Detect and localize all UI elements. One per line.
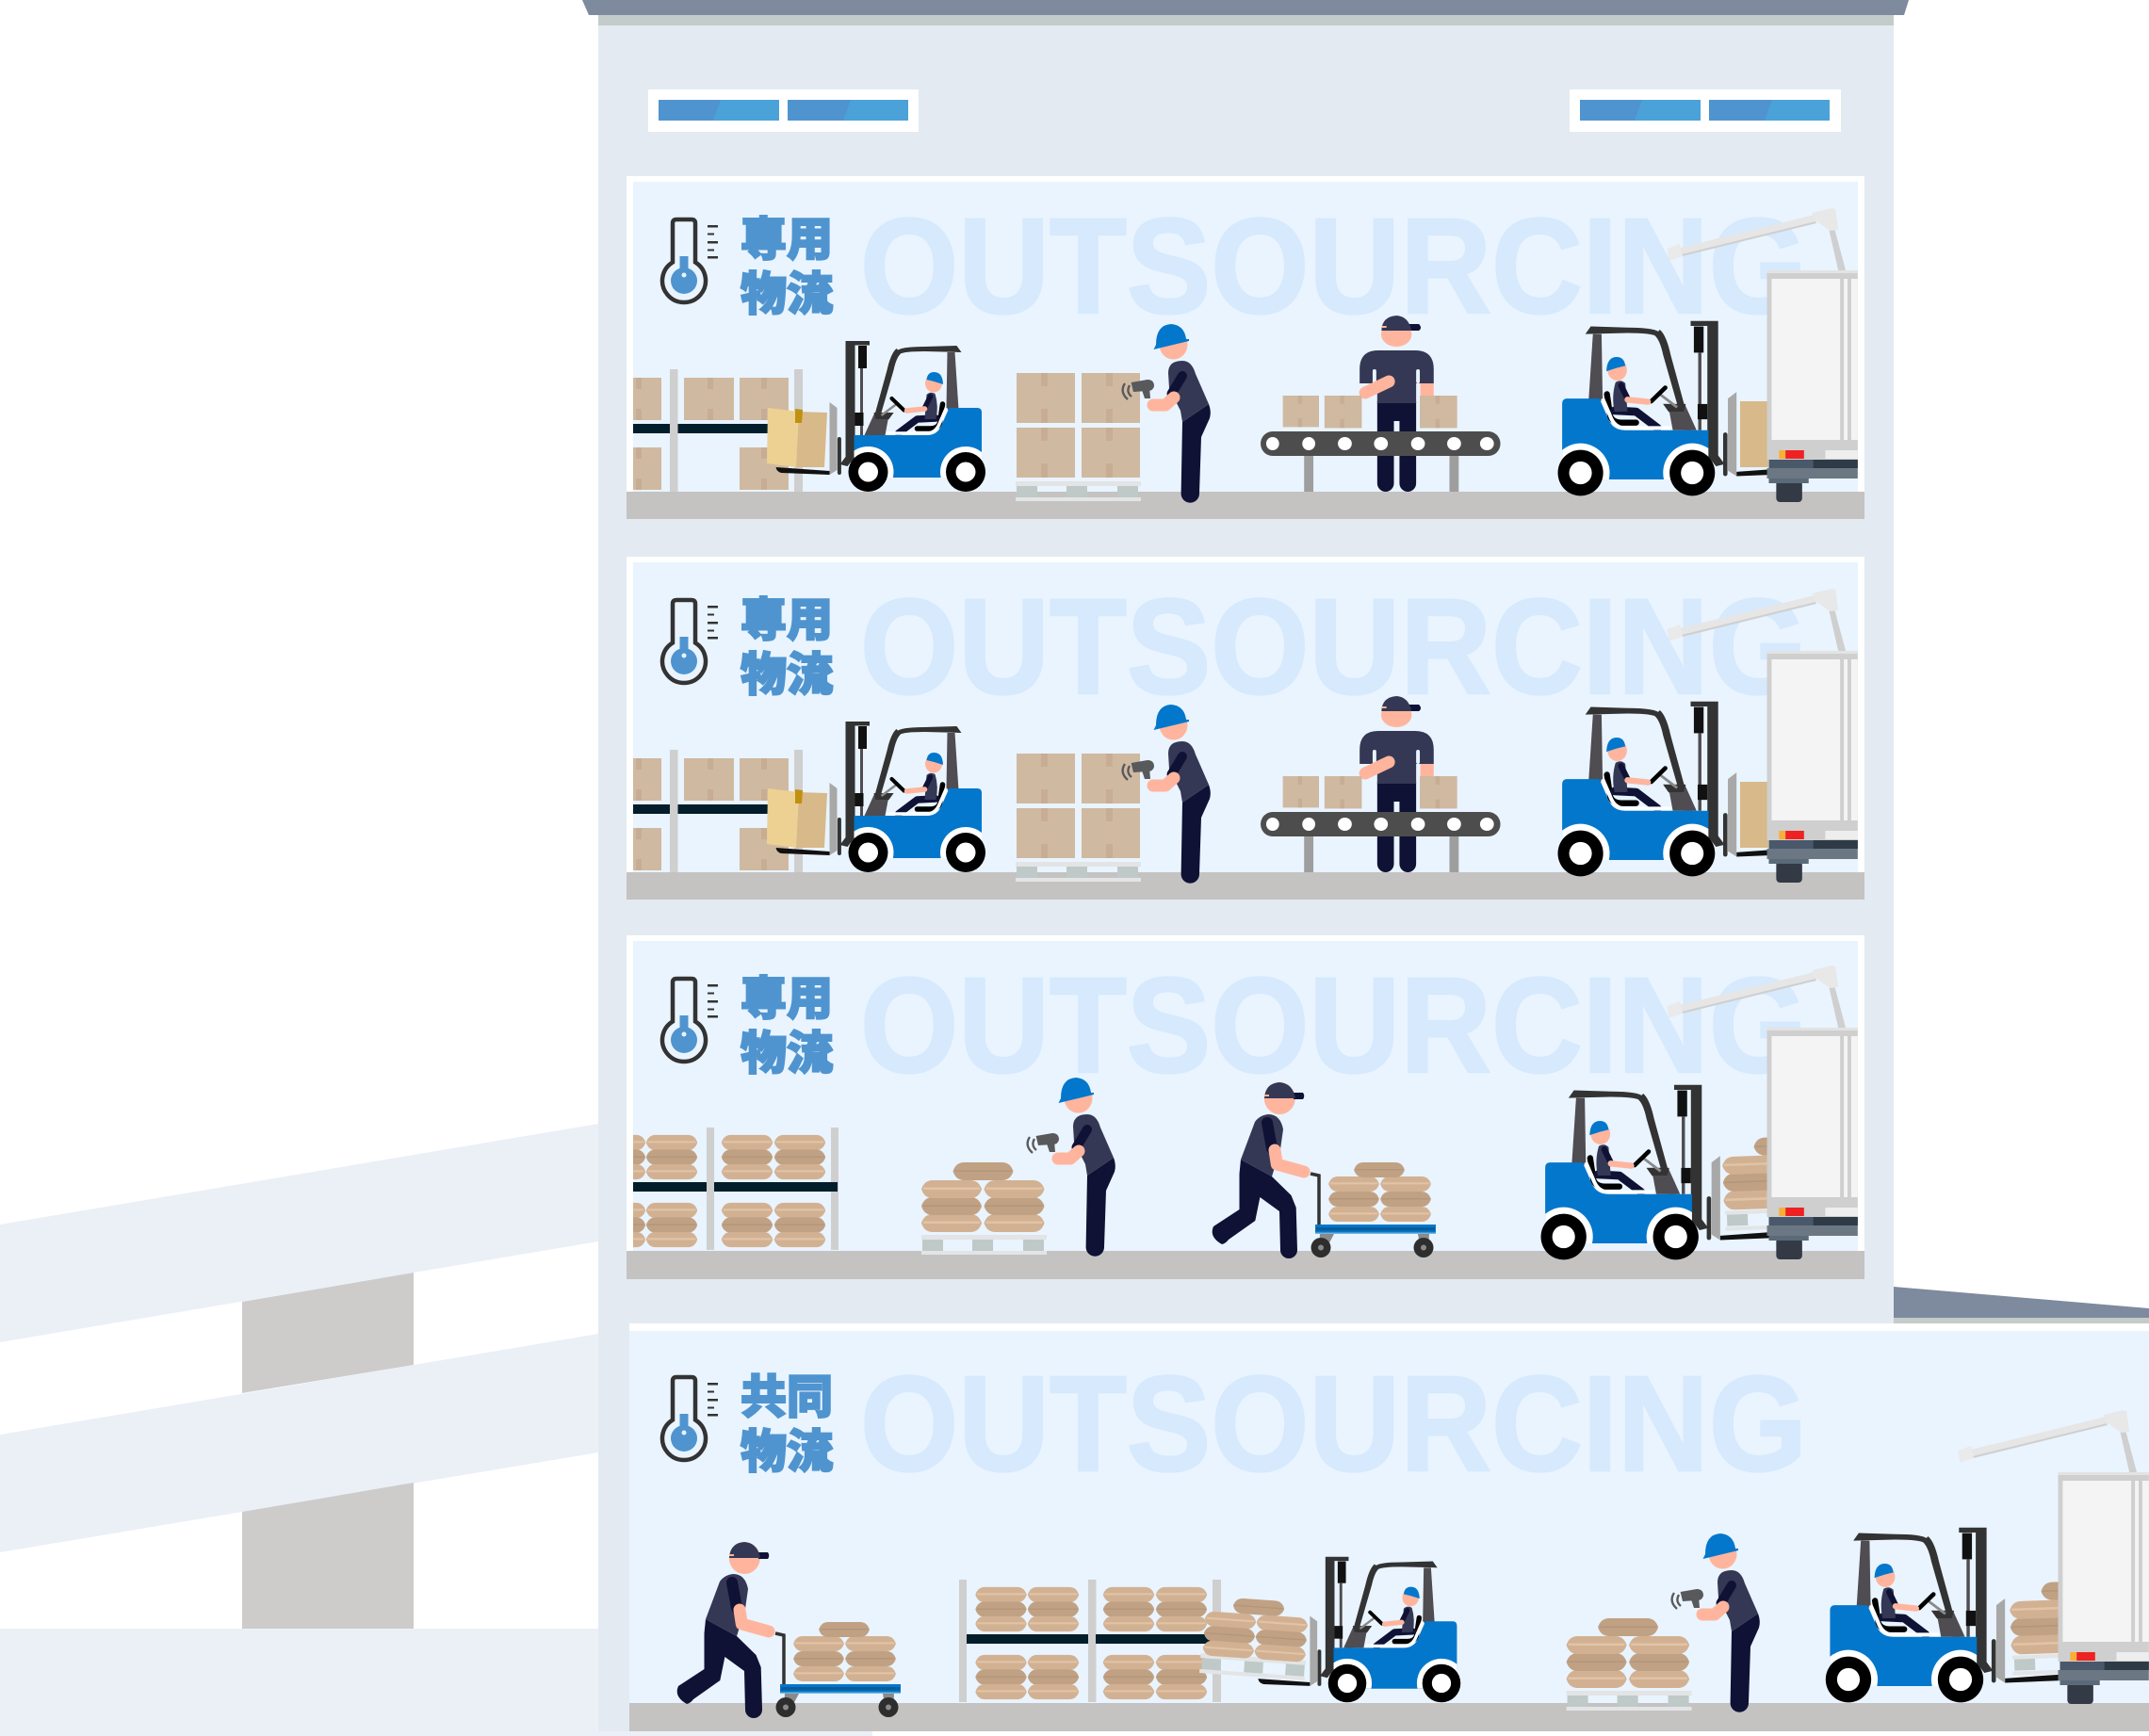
truck — [1958, 1410, 2149, 1704]
heading: 物流 — [741, 269, 833, 320]
shelf with sacks — [959, 1580, 1221, 1702]
building lower left wall — [598, 1323, 629, 1731]
building wall — [598, 25, 1894, 1323]
background: ramp band upper — [0, 1124, 598, 1342]
truck — [1667, 208, 1858, 502]
icon: thermometer — [662, 1377, 718, 1460]
worker with scanner — [1123, 324, 1211, 503]
background: ramp band lower — [0, 1334, 598, 1552]
ramp pillar upper — [242, 1273, 414, 1393]
heading: 共同 — [741, 1372, 833, 1423]
forklift loading truck — [1552, 321, 1799, 502]
heading: 専用 — [741, 215, 833, 266]
ground band — [0, 1629, 872, 1736]
shelf with sacks — [633, 1128, 838, 1250]
watermark: OUTSOURCING — [860, 190, 1807, 342]
icon: thermometer — [662, 219, 718, 302]
heading: 物流 — [741, 1427, 833, 1478]
heading: 物流 — [741, 1029, 833, 1079]
watermark: OUTSOURCING — [860, 571, 1807, 722]
heading: 専用 — [741, 595, 833, 646]
roof fascia — [598, 15, 1894, 25]
panel: floor 2 — [627, 557, 1864, 900]
heading: 物流 — [741, 650, 833, 701]
conveyor and worker — [1261, 316, 1501, 492]
watermark: OUTSOURCING — [860, 1348, 1807, 1500]
forklift with sacks — [1535, 1085, 1817, 1266]
forklift loading truck — [1552, 702, 1799, 883]
shelf with boxes — [633, 750, 803, 872]
watermark: OUTSOURCING — [860, 949, 1807, 1101]
panel: floor 1 — [627, 176, 1864, 519]
box pallet — [1016, 373, 1141, 501]
ramp pillar lower — [242, 1483, 414, 1629]
conveyor and worker — [1261, 696, 1501, 872]
annex roof — [1894, 1287, 2149, 1323]
shelf with boxes — [633, 369, 803, 492]
worker with scanner — [1028, 1078, 1115, 1257]
panel: floor 3 — [594, 935, 1864, 1279]
truck — [1667, 965, 1858, 1259]
forklift with box — [767, 722, 991, 878]
worker pushing cart — [1213, 1082, 1436, 1258]
window left — [648, 89, 919, 132]
panel: floor 4 — [629, 1323, 2149, 1731]
worker pushing cart — [677, 1542, 901, 1718]
sack pallet — [921, 1162, 1047, 1255]
sack pallet — [1567, 1618, 1692, 1711]
forklift with sacks — [1819, 1528, 2105, 1709]
forklift with tilted sacks — [1199, 1557, 1466, 1708]
truck — [1667, 589, 1858, 883]
worker with scanner — [1672, 1533, 1760, 1712]
window right — [1570, 89, 1841, 132]
forklift with box — [767, 341, 991, 497]
icon: thermometer — [662, 600, 718, 683]
worker with scanner — [1123, 705, 1211, 884]
icon: thermometer — [662, 979, 718, 1062]
roof — [582, 0, 1909, 15]
box pallet — [1016, 754, 1141, 882]
heading: 専用 — [741, 974, 833, 1025]
